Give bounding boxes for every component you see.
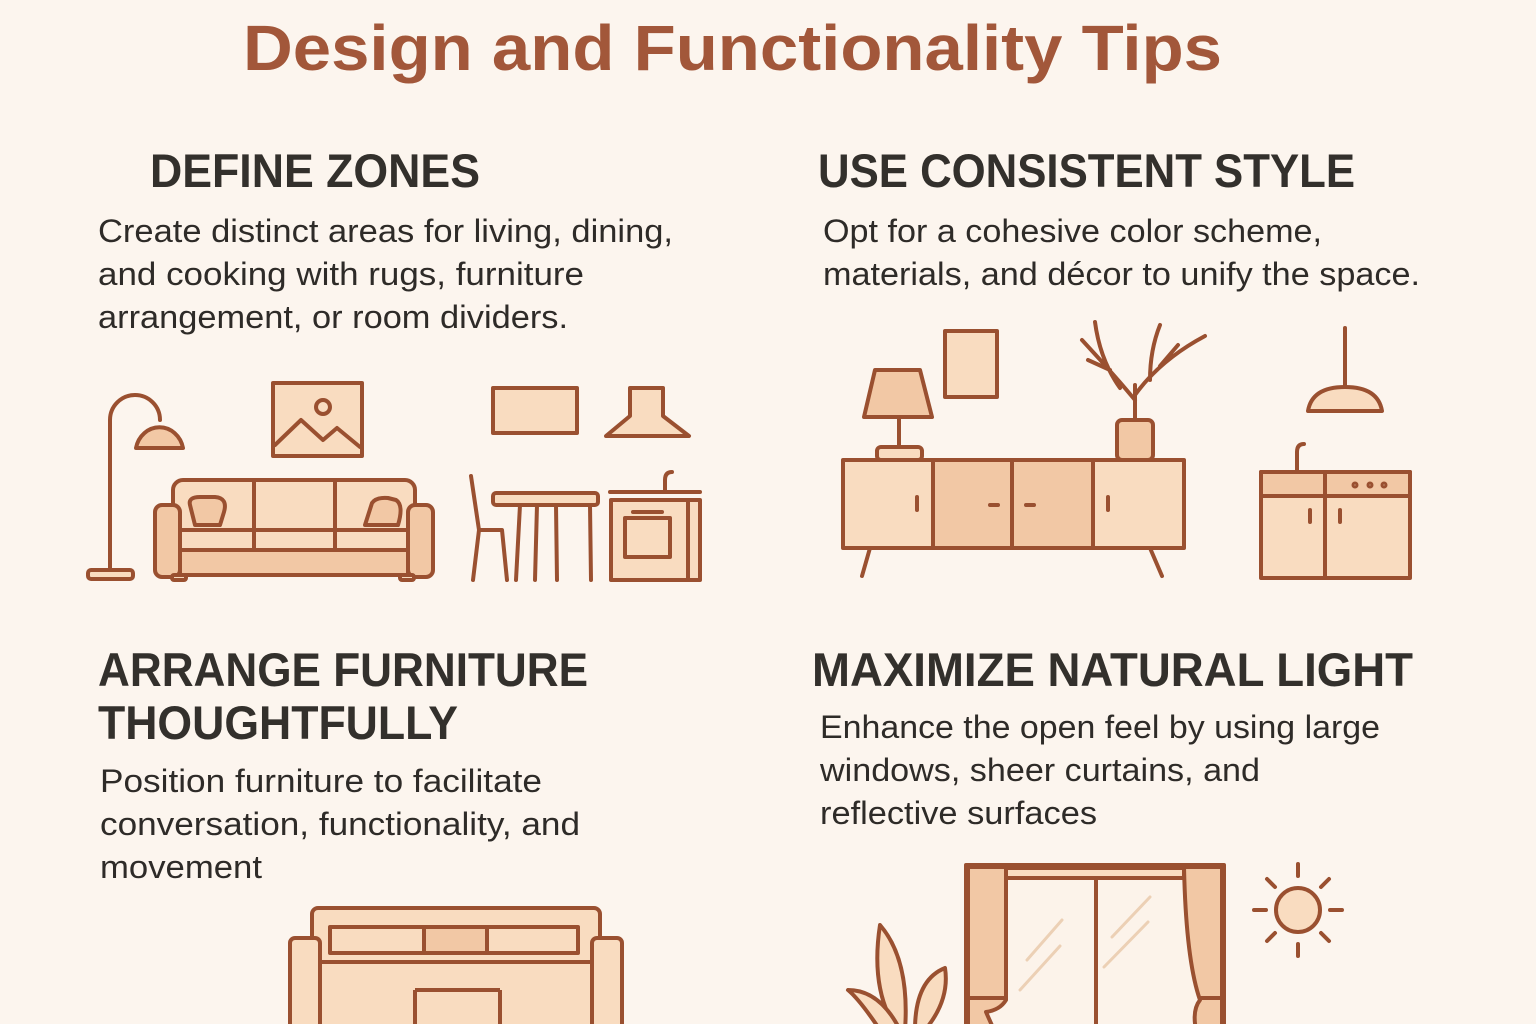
heading: use consistent style: USE CONSISTENT STYLE <box>818 144 1355 197</box>
text block: natural light: windows, sheer curtains, and <box>819 752 1260 788</box>
text block: arrange furniture: conversation, functionality, and <box>100 806 580 842</box>
text block: consistent style: Opt for a cohesive color scheme, <box>823 213 1322 249</box>
illustration: sideboard and kitchen <box>843 322 1410 578</box>
panel: natural light <box>812 643 1413 1024</box>
text block: define zones: and cooking with rugs, furniture <box>98 256 584 292</box>
icon: frame <box>945 331 997 397</box>
icon: dining chair and table <box>471 476 598 580</box>
text block: define zones: arrangement, or room dividers. <box>98 299 568 335</box>
illustration: window, plant, sun <box>848 864 1342 1024</box>
icon: plant <box>848 925 946 1024</box>
icon: vase with branches <box>1082 322 1205 460</box>
heading: arrange furniture: THOUGHTFULLY <box>98 696 458 749</box>
icon: wall cabinet <box>493 388 577 433</box>
icon: table lamp <box>864 370 932 460</box>
text block: define zones <box>98 213 673 335</box>
icon: sofa <box>155 480 433 580</box>
text block: arrange furniture: movement <box>100 849 262 885</box>
text block: natural light: reflective surfaces <box>820 795 1097 831</box>
heading: arrange furniture <box>98 643 588 749</box>
text block: natural light <box>819 709 1380 831</box>
icon: pendant light <box>1308 328 1382 411</box>
icon: kitchen unit <box>610 472 700 580</box>
illustration: sofa top view <box>290 908 622 1024</box>
title: Design and Functionality Tips <box>243 12 1222 84</box>
panel: define zones <box>88 144 700 580</box>
panel: consistent style <box>818 144 1420 578</box>
panel: arrange furniture <box>98 643 622 1024</box>
heading: define zones: DEFINE ZONES <box>150 144 480 197</box>
heading: arrange furniture: ARRANGE FURNITURE <box>98 643 588 696</box>
icon: sun <box>1254 864 1342 956</box>
icon: sideboard <box>843 460 1184 576</box>
text block: natural light: Enhance the open feel by using large <box>820 709 1380 745</box>
icon: range hood <box>606 388 689 436</box>
icon: floor lamp <box>88 395 183 579</box>
icon: kitchen cabinet <box>1261 444 1410 578</box>
icon: picture frame <box>273 383 362 456</box>
text block: arrange furniture <box>100 763 580 885</box>
text block: consistent style <box>823 213 1420 292</box>
illustration: living, dining, kitchen <box>88 383 700 580</box>
text block: define zones: Create distinct areas for living, dining, <box>98 213 673 249</box>
text block: consistent style: materials, and décor to unify the space. <box>823 256 1420 292</box>
text block: arrange furniture: Position furniture to facilitate <box>100 763 542 799</box>
heading: maximize natural light: MAXIMIZE NATURAL LIGHT <box>812 643 1413 696</box>
icon: window with curtains <box>966 865 1224 1024</box>
